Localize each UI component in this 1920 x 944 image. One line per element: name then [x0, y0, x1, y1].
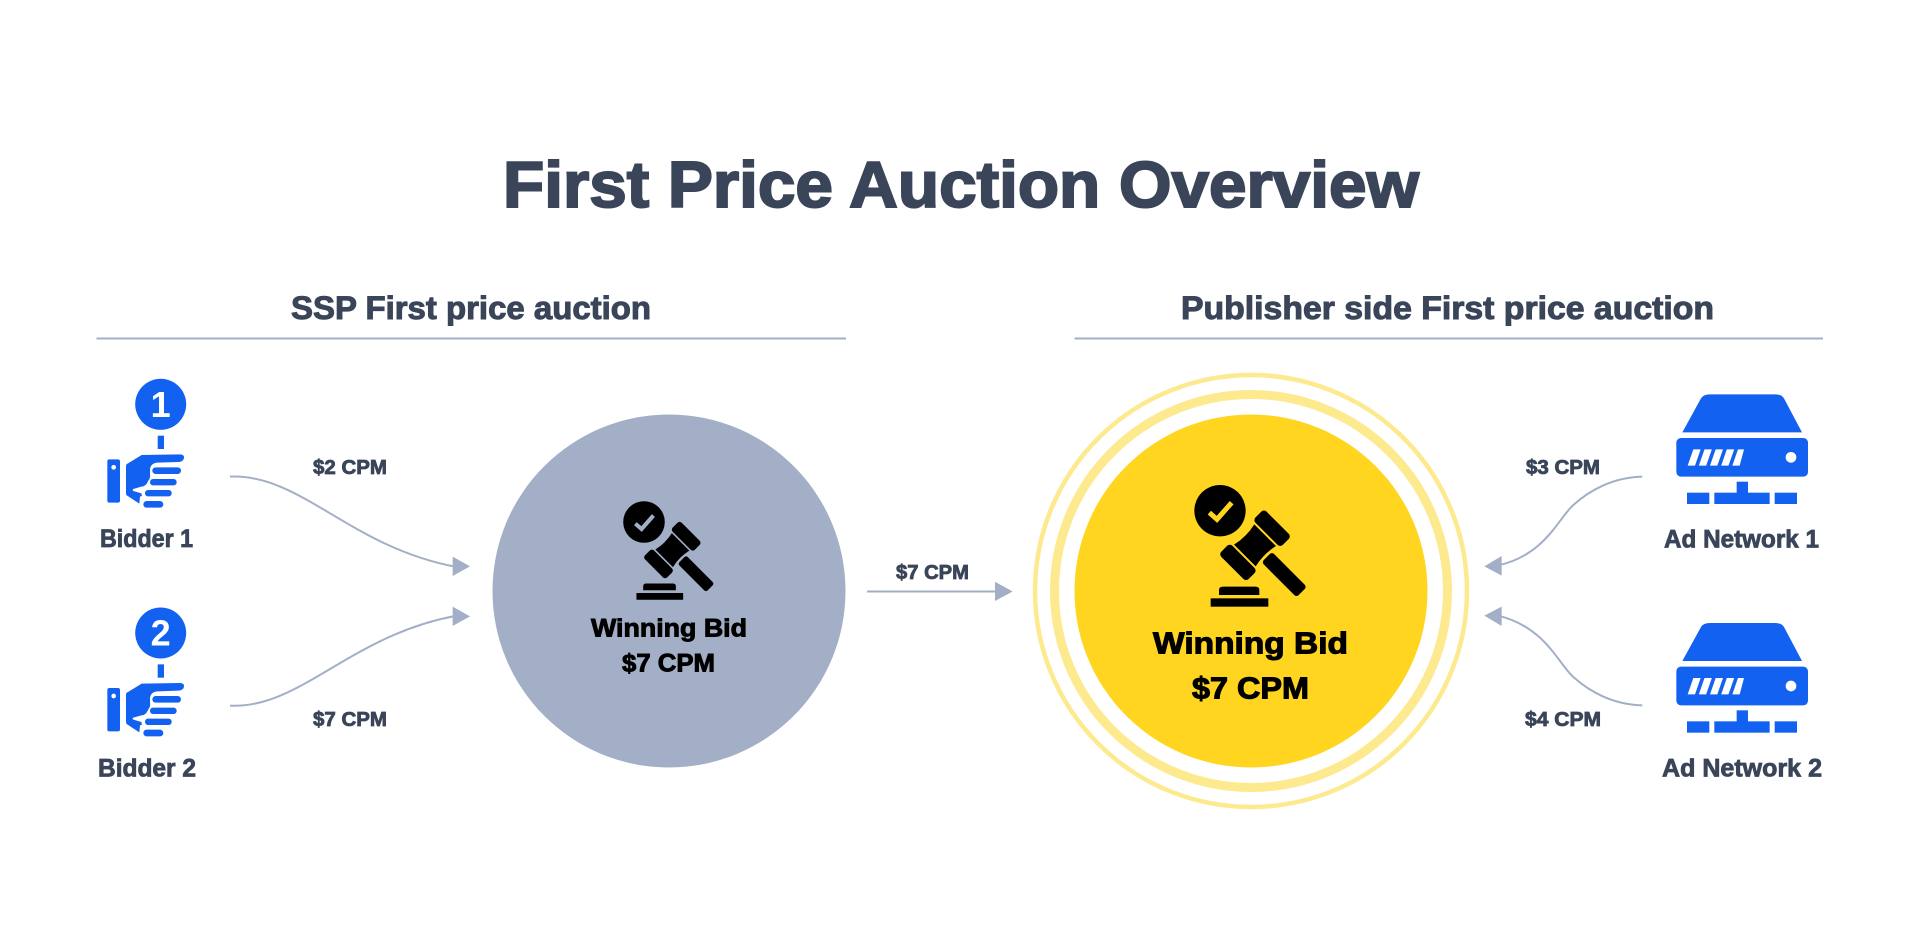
label: Ad Network 2: Ad Network 2 [1662, 754, 1822, 782]
arrow: bidder 1 to SSP auction [230, 477, 470, 576]
heading: SSP First price auction: SSP First price auction [291, 290, 651, 326]
arrow: SSP to publisher auction [867, 582, 1013, 601]
title: First Price Auction Overview [503, 148, 1419, 221]
label: $3 CPM: $3 CPM [1526, 457, 1600, 479]
icon: bidder 2 numbered hand: 2 [151, 613, 171, 654]
icon: bidder 2 numbered hand [107, 607, 186, 736]
arrow: ad network 1 to publisher auction [1484, 477, 1642, 576]
panel: SSP winning bid circle [492, 414, 846, 768]
label: $7 CPM yellow: $7 CPM [1192, 670, 1309, 706]
label: Ad Network 1: Ad Network 1 [1664, 526, 1819, 554]
icon: bidder 1 numbered hand [107, 379, 186, 508]
label: $7 CPM grey: $7 CPM [622, 650, 715, 678]
label: Bidder 2: Bidder 2 [98, 754, 196, 782]
arrow: bidder 2 to SSP auction [230, 607, 470, 706]
icon: bidder 1 numbered hand: 1 [151, 384, 171, 425]
heading: Publisher side First price auction: Publisher side First price auction [1181, 290, 1714, 326]
icon: ad network 2 server [1676, 623, 1808, 733]
label: Winning Bid grey: Winning Bid [591, 614, 747, 642]
label: Bidder 1: Bidder 1 [100, 525, 193, 553]
label: $7 CPM between auctions: $7 CPM [896, 562, 969, 584]
icon: gavel with check [623, 501, 728, 606]
label: $7 CPM bidder 2: $7 CPM [313, 709, 387, 731]
label: $4 CPM: $4 CPM [1525, 709, 1601, 731]
label: Winning Bid yellow: Winning Bid [1153, 626, 1348, 660]
label: $2 CPM: $2 CPM [313, 457, 387, 479]
panel: publisher winning bid circle [1035, 375, 1467, 807]
arrow: ad network 2 to publisher auction [1484, 607, 1642, 705]
icon: ad network 1 server [1676, 394, 1808, 504]
icon: gavel with check [1194, 485, 1324, 615]
